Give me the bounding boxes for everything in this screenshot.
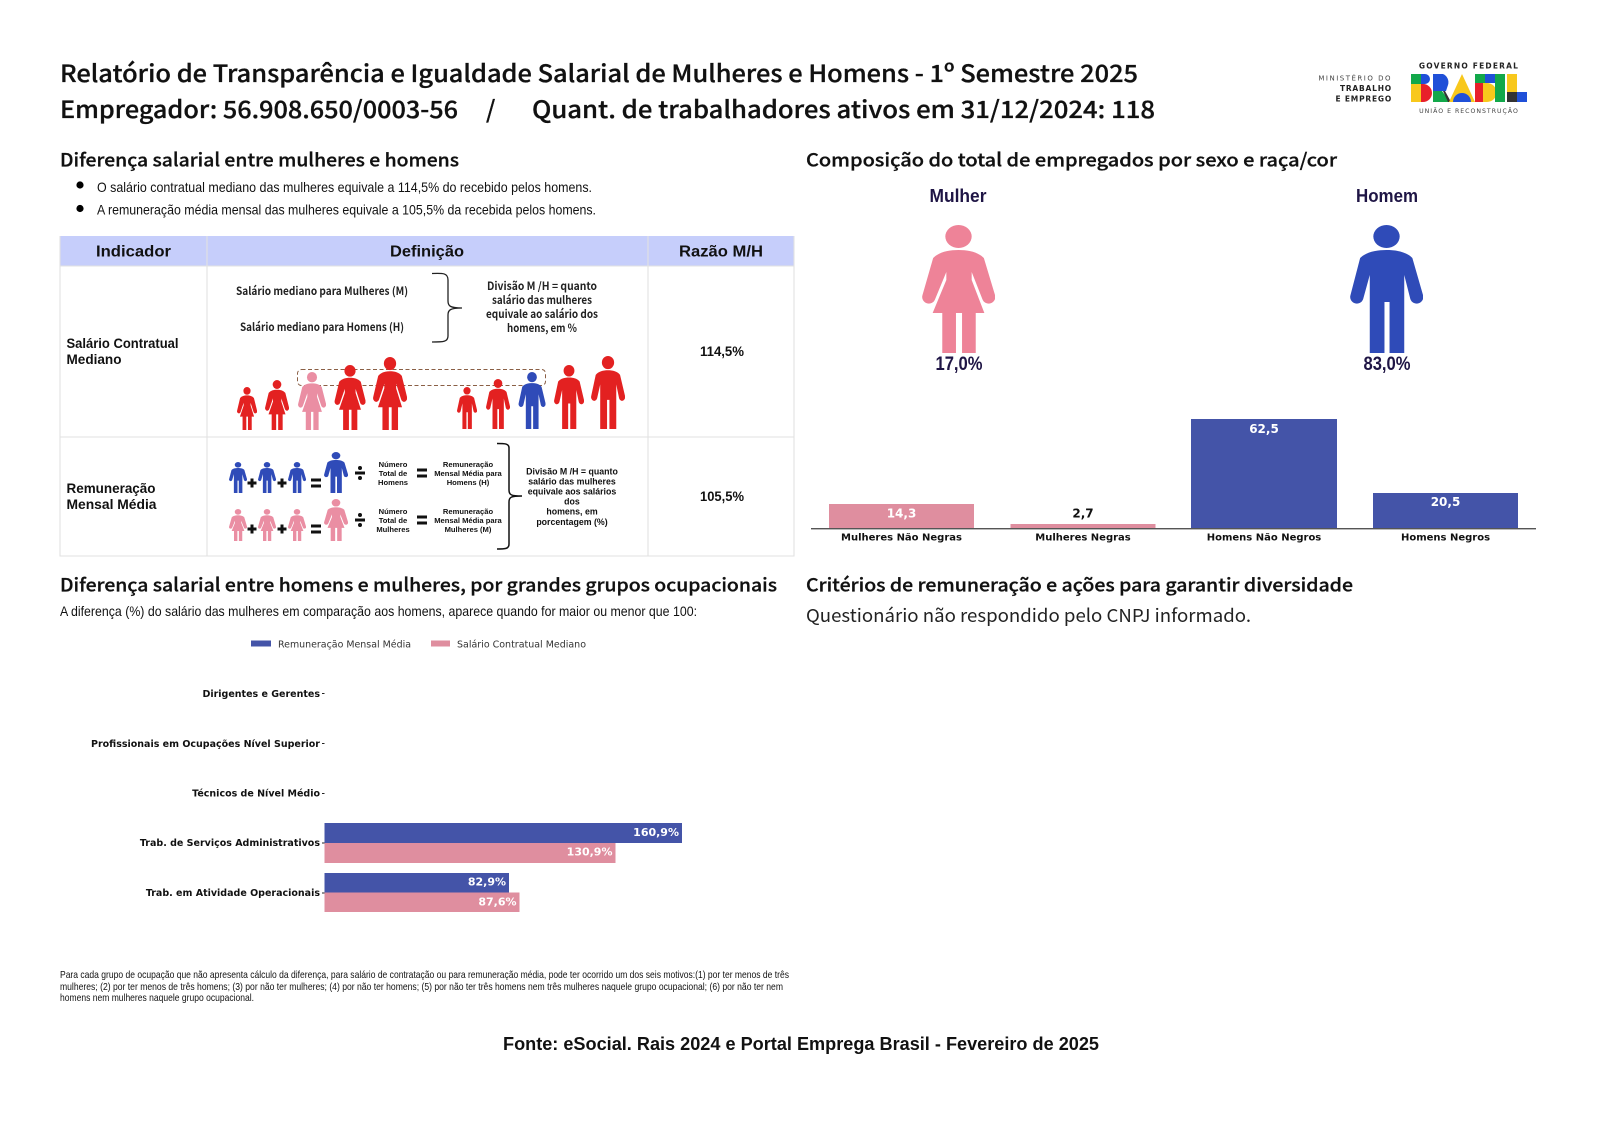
definition: divisão: equivale aos salários [528, 486, 616, 496]
panel: critérios [806, 572, 1353, 628]
title: Quant. de trabalhadores ativos em 31/12/2024: 118 [532, 90, 1155, 125]
formula text: homens: Remuneração [443, 460, 493, 469]
footnote: homens nem mulheres naquele grupo ocupacional. [60, 992, 254, 1004]
bullet list: A remuneração média mensal das mulheres equivale a 105,5% da recebida pelos homens. [97, 202, 596, 218]
icons: mulheres soma [229, 499, 348, 541]
source: Fonte: eSocial. Rais 2024 e Portal Emprega Brasil - Fevereiro de 2025 [503, 1033, 1099, 1054]
logo: ministério do trabalho e emprego [1318, 74, 1392, 104]
legend: Salário Contratual Mediano [457, 640, 586, 650]
panel: grupos ocupacionais [60, 572, 789, 1004]
heading: diferença salarial entre mulheres e homens: Diferença salarial entre mulheres e homens [60, 147, 459, 173]
icon: homem [1350, 186, 1423, 375]
bar chart: grupos: Dirigentes e Gerentes [202, 689, 320, 700]
icons: homens soma [229, 452, 348, 493]
bar chart: grupos: Trab. em Atividade Operacionais [146, 888, 320, 899]
row: salário contratual mediano: Mediano [66, 351, 122, 367]
definition: salário mediano: equivale ao salário dos [486, 306, 598, 322]
row: salário contratual mediano: 114,5% [700, 343, 745, 359]
bar chart: sexo e raça: Homens Não Negros [1207, 532, 1321, 544]
table header [96, 244, 763, 260]
bar chart: sexo e raça: 20,5 [1431, 495, 1460, 509]
table header: Razão M/H [679, 244, 763, 260]
definition: divisão: porcentagem (%) [536, 517, 608, 527]
footnote: mulheres; (2) por ter menos de três homens; (3) por não ter mulheres; (4) por não ter homens; (5) por não ter três homens nem três mulheres naquele grupo ocupacional; (6) por não ter nem [60, 981, 783, 993]
bar chart: sexo e raça: 14,3 [887, 506, 916, 520]
footnote [60, 969, 789, 1004]
definition: salário mediano [236, 273, 598, 342]
definition: salário mediano: salário das mulheres [492, 292, 592, 308]
definition: divisão [526, 466, 618, 527]
row: salário contratual mediano [66, 273, 745, 430]
bar chart: grupos: Técnicos de Nível Médio [192, 788, 320, 800]
bar chart: grupos: Profissionais em Ocupações Nível Superior [91, 739, 320, 750]
brace [497, 444, 522, 549]
formula text: homens [378, 460, 503, 487]
bar chart: grupos: 130,9% [567, 846, 612, 858]
formula text: homens: Homens (H) [447, 478, 490, 487]
bar chart: sexo e raça: Mulheres Negras [1035, 532, 1131, 544]
logo: ministério do trabalho e emprego: MINISTÉRIO DO [1318, 74, 1392, 82]
logo: ministério do trabalho e emprego: E EMPREGO [1336, 94, 1392, 104]
bar chart: grupos: 160,9% [633, 826, 679, 839]
definition: divisão: Divisão M /H = quanto [526, 466, 618, 476]
legend [251, 640, 586, 650]
bullet list: O salário contratual mediano das mulheres equivale a 114,5% do recebido pelos homens. [97, 179, 592, 195]
logo: ministério do trabalho e emprego: TRABALHO [1340, 84, 1392, 93]
icon: homem: 83,0% [1364, 354, 1411, 375]
formula text: mulheres: Número [379, 507, 408, 516]
footnote: Para cada grupo de ocupação que não apresenta cálculo da diferença, para salário de contratação ou para remuneração média, pode ter ocorrido um dos seis motivos:(1) por ter menos de três [60, 969, 789, 981]
bar chart: sexo e raça: Homens Negros [1401, 532, 1490, 544]
bar chart: grupos: 82,9% [468, 876, 506, 888]
bar chart: grupos: Trab. de Serviços Administrativos [140, 838, 320, 849]
formula text: homens: Mensal Média para [434, 469, 503, 478]
formula text: homens: Homens [378, 478, 408, 487]
bar chart: grupos [91, 689, 682, 912]
formula text: mulheres [376, 507, 503, 534]
logo: governo federal brasil: UNIÃO E RECONSTRUÇÃO [1419, 106, 1519, 115]
table header: Indicador [96, 244, 171, 260]
bar chart: sexo e raça: 62,5 [1249, 422, 1279, 436]
definition: divisão: salário das mulheres [528, 476, 616, 486]
heading: grupos ocupacionais: Diferença salarial entre homens e mulheres, por grandes grupos ocupacionais [60, 572, 777, 598]
logo: governo federal brasil: GOVERNO FEDERAL [1419, 62, 1519, 70]
bullet list [76, 179, 596, 218]
formula text: mulheres: Mensal Média para [434, 516, 503, 525]
icon: mulher: 17,0% [936, 354, 983, 375]
title: / [486, 90, 495, 125]
operators [248, 466, 427, 534]
definition: divisão: homens, em [546, 506, 598, 516]
definition: salário mediano: homens, em % [507, 320, 577, 336]
logo: governo federal brasil [1411, 62, 1527, 115]
definition: divisão: dos [564, 496, 580, 506]
text: explicação: A diferença (%) do salário das mulheres em comparação aos homens, aparece quando for maior ou menor que 100: [60, 603, 697, 619]
title [60, 54, 1155, 125]
definition: salário mediano: Salário mediano para Mulheres (M) [236, 283, 408, 299]
formula text: mulheres: Mulheres [376, 525, 410, 534]
formula text: mulheres: Remuneração [443, 507, 493, 516]
row: salário contratual mediano: Salário Contratual [66, 335, 178, 351]
title: Empregador: 56.908.650/0003-56 [60, 90, 458, 125]
formula text: mulheres: Total de [379, 516, 407, 525]
row: remuneração mensal média: Mensal Média [66, 496, 157, 512]
text: questionário: Questionário não respondido pelo CNPJ informado. [806, 602, 1251, 628]
title: Relatório de Transparência e Igualdade Salarial de Mulheres e Homens - 1º Semestre 2025 [60, 54, 1138, 89]
heading: composição: Composição do total de empregados por sexo e raça/cor [806, 147, 1337, 173]
panel: composição [806, 147, 1536, 543]
icon: mulher [922, 186, 995, 375]
definition: salário mediano: Salário mediano para Homens (H) [240, 319, 404, 335]
icon: mulher: Mulher [930, 186, 986, 206]
bar chart: sexo e raça: 2,7 [1072, 506, 1094, 520]
legend: Remuneração Mensal Média [278, 640, 411, 650]
bar chart: sexo e raça [811, 419, 1536, 544]
table [60, 236, 794, 556]
formula text: mulheres: Mulheres (M) [445, 525, 492, 534]
row: remuneração mensal média: Remuneração [66, 480, 156, 496]
icon: homem: Homem [1356, 186, 1418, 206]
bar chart: grupos: 87,6% [478, 896, 516, 908]
row: remuneração mensal média [66, 444, 745, 549]
icons: mediana pessoas [237, 356, 625, 430]
row: remuneração mensal média: 105,5% [700, 488, 745, 504]
formula text: homens: Total de [379, 469, 407, 478]
bar chart: sexo e raça: Mulheres Não Negras [841, 532, 962, 544]
definition: salário mediano: Divisão M /H = quanto [487, 278, 597, 294]
formula text: homens: Número [379, 460, 408, 469]
panel: diferença salarial [60, 147, 794, 556]
heading: critérios: Critérios de remuneração e ações para garantir diversidade [806, 572, 1353, 598]
table header: Definição [390, 244, 464, 260]
